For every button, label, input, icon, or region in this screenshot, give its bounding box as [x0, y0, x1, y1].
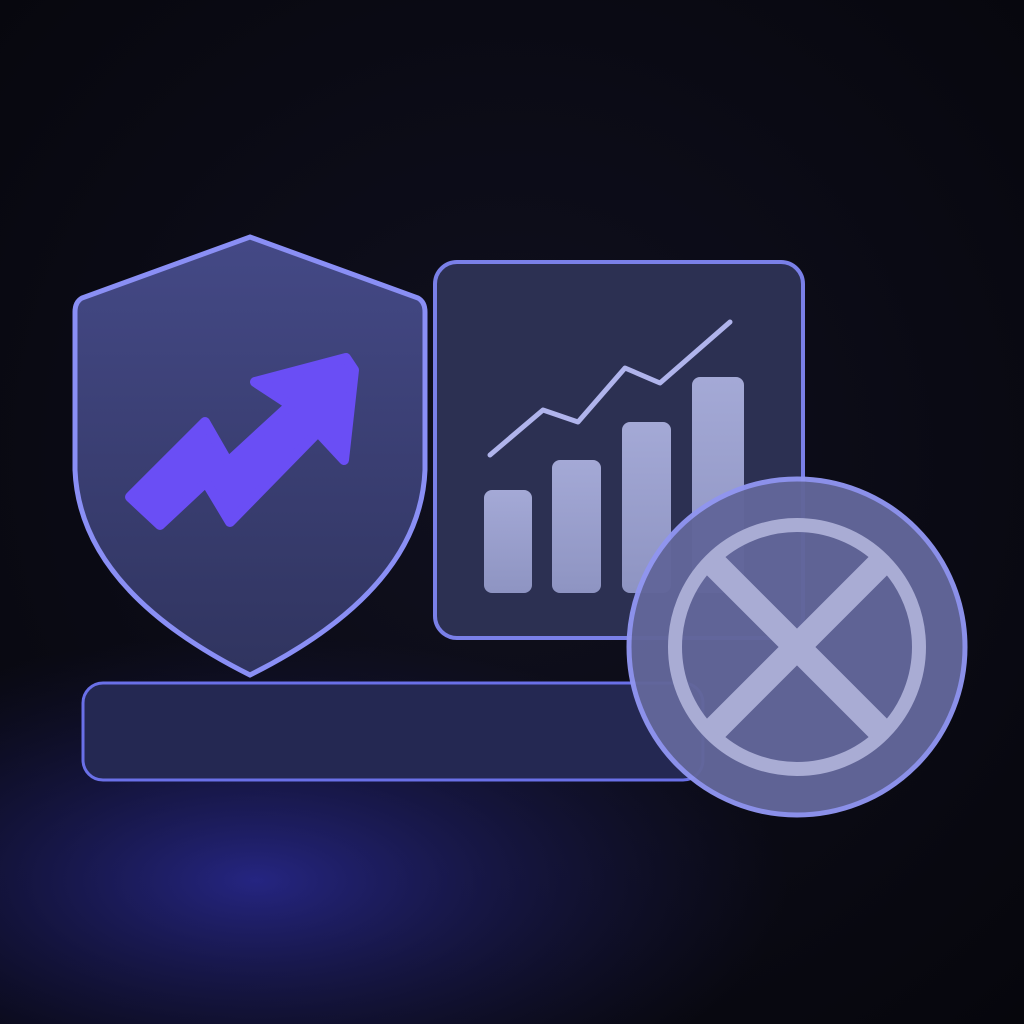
line chart	[490, 322, 730, 455]
shield with arrow	[75, 237, 425, 675]
icon: cancel circle	[629, 479, 965, 815]
bar chart	[484, 377, 744, 593]
panel: chart	[435, 262, 803, 638]
icon: trend arrow	[130, 358, 354, 525]
base bar	[83, 683, 703, 780]
